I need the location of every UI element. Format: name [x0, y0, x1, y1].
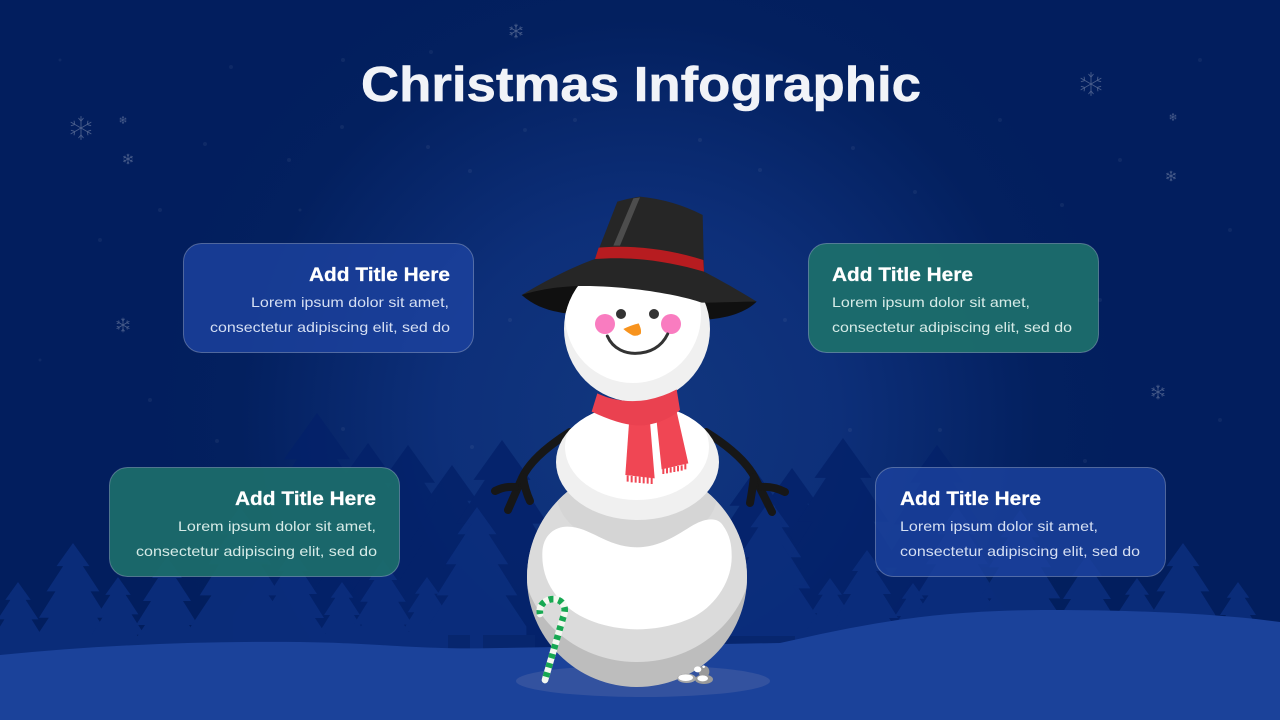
icon: right arm	[706, 432, 785, 512]
text block: top right: Lorem ipsum dolor sit amet,	[832, 294, 1030, 310]
hat crown and brim	[522, 197, 757, 303]
hat highlight	[613, 197, 640, 246]
heading: top right: Add Title Here	[832, 265, 973, 286]
snowy ground	[0, 610, 1280, 720]
panel: bottom left	[110, 468, 400, 576]
nose	[623, 323, 641, 336]
snowman illustration	[495, 197, 785, 697]
icon: left arm	[495, 432, 570, 510]
scarf	[592, 389, 688, 484]
middle snowball	[556, 412, 719, 520]
panel: top left	[184, 244, 474, 352]
scarf wrap	[592, 389, 680, 426]
bottom snowball	[527, 492, 747, 687]
text block: bottom right: consectetur adipiscing elit, sed do	[900, 543, 1140, 559]
text block: top left: consectetur adipiscing elit, sed do	[210, 319, 450, 335]
top hat	[522, 197, 757, 303]
hat band	[595, 247, 704, 272]
dark tree bases	[448, 635, 795, 649]
scarf tail right	[657, 412, 688, 474]
text block: bottom left: consectetur adipiscing elit, sed do	[136, 543, 377, 559]
ground shadow	[516, 665, 770, 697]
text block: bottom left: Lorem ipsum dolor sit amet,	[178, 518, 376, 534]
panel: top right	[808, 244, 1098, 352]
heading: top left: Add Title Here	[309, 265, 450, 286]
snow dots	[38, 50, 1232, 463]
heading: bottom right: Add Title Here	[900, 489, 1041, 510]
face	[595, 309, 681, 353]
snowflakes	[71, 24, 1176, 399]
cheeks	[595, 314, 681, 334]
text block: bottom right: Lorem ipsum dolor sit amet,	[900, 518, 1098, 534]
icon: snow pebbles	[677, 665, 713, 684]
text block: top right: consectetur adipiscing elit, sed do	[832, 319, 1072, 335]
heading: bottom left: Add Title Here	[235, 489, 376, 510]
scarf tail left	[625, 422, 655, 484]
hat brim underside	[522, 285, 757, 319]
back forest	[233, 413, 1005, 657]
smile	[607, 334, 668, 353]
icon: candy cane	[540, 599, 565, 680]
eyes	[616, 309, 659, 319]
text block: top left: Lorem ipsum dolor sit amet,	[251, 294, 449, 310]
head	[564, 286, 710, 402]
panel: bottom right	[876, 468, 1166, 576]
front forest	[0, 500, 1267, 676]
title: Christmas Infographic	[361, 58, 921, 112]
